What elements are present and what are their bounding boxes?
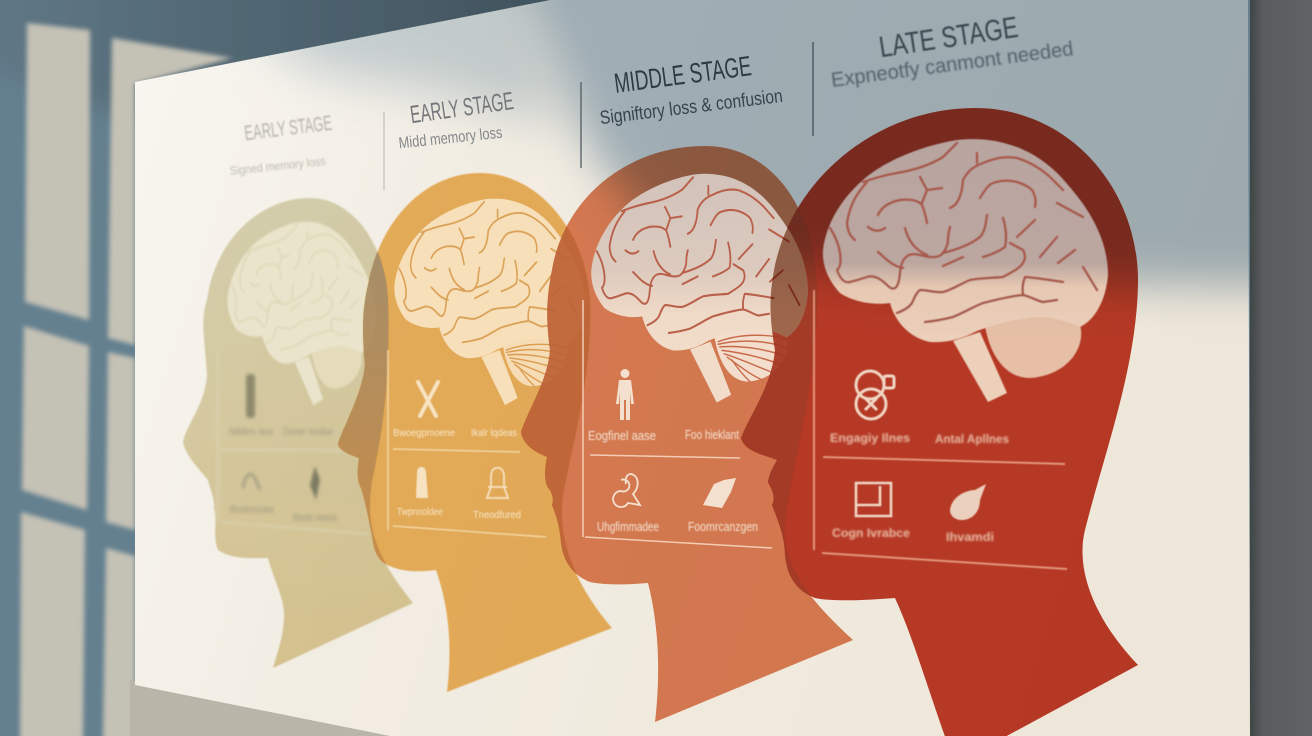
faded labels: Dooer noalse — [283, 426, 333, 438]
divider line 1 — [383, 112, 385, 190]
cerebellum: coral — [714, 329, 775, 382]
wall dark upper tone — [0, 0, 620, 120]
red labels — [830, 431, 1009, 544]
brain: late stage — [823, 139, 1108, 402]
cerebellum: red — [985, 317, 1081, 378]
overlap: red head over middle brain — [741, 108, 1138, 736]
faded labels: Ntbbrs aus — [229, 426, 273, 438]
right wall — [1250, 0, 1312, 736]
stage 1 faded early stage — [183, 198, 413, 668]
icon: arch — [487, 468, 508, 498]
icon: faded hand — [243, 474, 260, 490]
grid: red symptoms — [814, 290, 1067, 569]
faded labels: Bnobnoclee — [230, 504, 274, 516]
grid: orange symptoms — [388, 350, 546, 537]
overlap: orange over beige — [338, 252, 388, 564]
soft pale shadow near top edge — [250, 0, 560, 125]
grid: faded symptoms — [217, 372, 367, 535]
orange labels: Ikalr lqdeas — [471, 427, 517, 439]
stage 2 early stage — [338, 173, 612, 692]
coral labels: Eogfinel aase — [588, 428, 656, 443]
overlap: red over coral — [741, 208, 817, 596]
divider line 2 — [580, 82, 582, 168]
head silhouette: orange — [338, 173, 612, 692]
subheading: early: Midd memory loss — [398, 125, 503, 152]
brain: middle stage — [591, 174, 808, 403]
red labels: Antal Apllnes — [935, 432, 1009, 446]
heading: early stage: EARLY STAGE — [408, 87, 515, 129]
head silhouette: faded — [183, 198, 413, 668]
subheading: late: Expneotfy canmont needed — [830, 38, 1075, 92]
coral labels: Foomrcanzgen — [688, 519, 758, 534]
icon: hand — [703, 478, 736, 508]
subheading: middle: Signiftory loss & confusion — [599, 86, 784, 129]
divider line 3 — [812, 42, 814, 136]
heading: middle stage: MIDDLE STAGE — [612, 50, 753, 99]
icon: linked figures — [613, 474, 640, 507]
icon: faded person — [310, 466, 320, 500]
red labels: Ihvamdi — [946, 530, 994, 544]
icon: faded figure — [246, 374, 255, 418]
head silhouette: red — [741, 108, 1138, 736]
window light on wall — [20, 23, 232, 736]
coral labels: Foo hieklant — [685, 427, 739, 442]
orange labels: Tneodfured — [473, 509, 521, 521]
orange labels: Twpnnoldee — [397, 506, 443, 518]
wall below poster — [130, 680, 395, 736]
shadow band over poster top — [500, 0, 1312, 288]
red labels: Cogn Ivrabce — [832, 526, 910, 540]
orange labels — [393, 427, 521, 521]
icon: person — [416, 467, 428, 498]
heading: faded early stage: EARLY STAGE — [243, 112, 333, 145]
faded labels: Beels neess — [293, 512, 337, 524]
brain: faded — [227, 221, 376, 406]
faded labels — [229, 426, 337, 524]
stage 3 middle stage — [521, 146, 853, 722]
subheading: faded: Signed memory loss — [229, 154, 326, 178]
coral labels: Uhgfimmadee — [597, 519, 659, 534]
coral labels — [588, 427, 758, 534]
grid: coral symptoms — [583, 300, 772, 548]
orange labels: Bwoegpmoene — [393, 427, 455, 439]
icon: folded square — [856, 483, 891, 516]
icon: standing person — [616, 369, 634, 420]
heading: late stage: LATE STAGE — [877, 11, 1020, 64]
brain: orange — [394, 198, 561, 405]
overlap: coral over orange — [521, 227, 590, 574]
icon: crossed tools — [418, 382, 438, 416]
icon: blob — [950, 484, 986, 520]
head silhouette: coral — [521, 146, 853, 722]
stage 4 late stage — [741, 108, 1138, 736]
icon: clustered circles — [856, 371, 894, 419]
red labels: Engagiy Ilnes — [830, 431, 910, 445]
